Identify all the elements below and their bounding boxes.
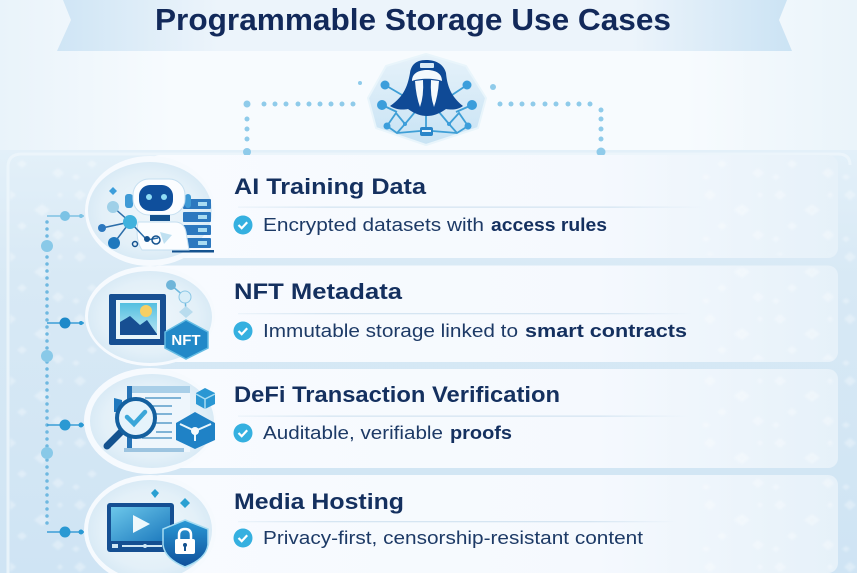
icon: video player and lock shield (107, 489, 208, 567)
icon: check badge (234, 424, 252, 442)
description: smart contracts (525, 321, 687, 341)
icon: document, magnifier and cubes (107, 386, 215, 452)
icon: NFT picture and hexagon: NFT (171, 332, 201, 349)
icon: check badge (234, 528, 252, 548)
description: proofs (450, 423, 512, 443)
heading: AI Training Data (234, 174, 427, 199)
description: Auditable, verifiable (263, 423, 443, 443)
description: access rules (491, 215, 607, 235)
description: Privacy-first, censorship-resistant content (263, 528, 643, 548)
icon: robot with servers and network (98, 179, 214, 252)
title: Programmable Storage Use Cases (155, 2, 671, 37)
dotted connector: left timeline (41, 211, 84, 538)
icon: NFT picture and hexagon (109, 280, 208, 359)
heading: DeFi Transaction Verification (234, 382, 560, 407)
panel: DeFi Transaction Verification card (84, 368, 838, 474)
lower panel background (0, 150, 857, 573)
panel: AI Training Data card (85, 155, 838, 266)
heading: Media Hosting (234, 489, 404, 514)
icon: check badge (234, 216, 252, 234)
heading: NFT Metadata (234, 279, 403, 304)
outer panel outline (8, 154, 850, 573)
panel: Media Hosting card (84, 475, 838, 573)
dotted connector: logo to cards (243, 81, 606, 156)
description: Encrypted datasets with (263, 215, 484, 235)
panel: NFT Metadata card (85, 266, 838, 366)
background diamond texture (10, 150, 857, 573)
title ribbon (57, 0, 792, 51)
icon: walrus network logo (368, 54, 486, 145)
description: Immutable storage linked to (263, 321, 518, 341)
icon: check badge (234, 322, 252, 340)
